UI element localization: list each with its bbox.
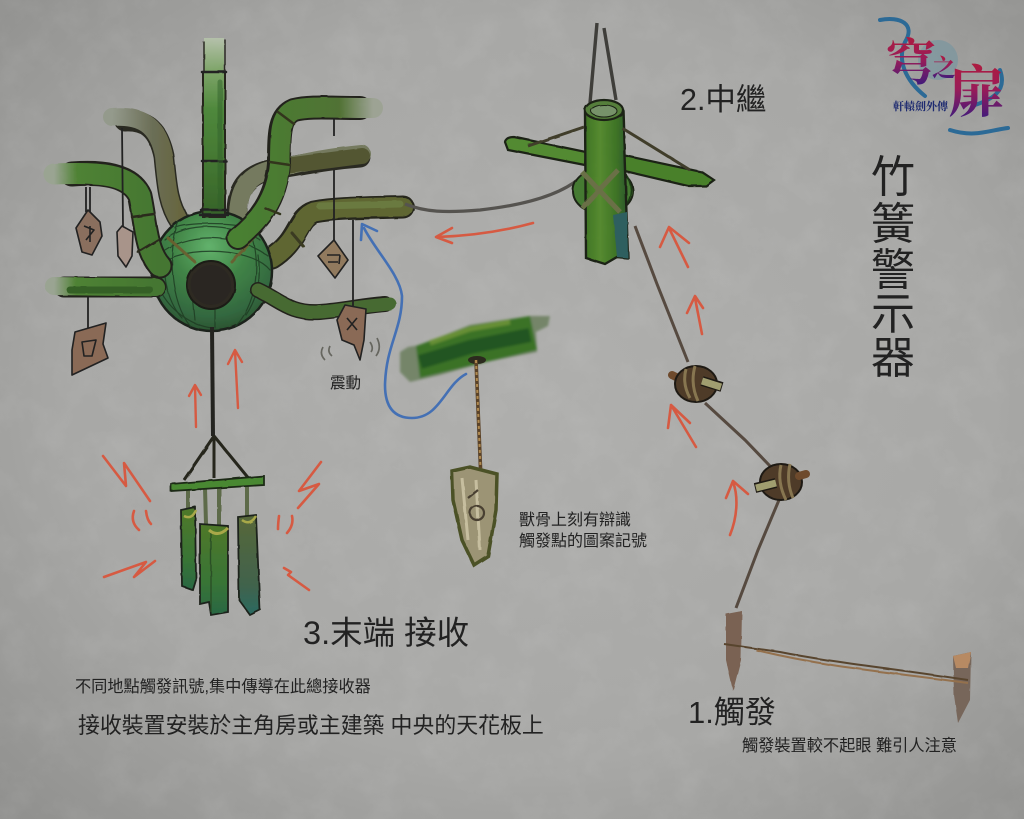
arm: right mid: [272, 204, 403, 258]
logo: 穹: [886, 23, 936, 95]
relay hanging strings: [590, 23, 616, 103]
arm: back right gray: [237, 154, 362, 218]
title: vertical: 簧: [871, 200, 915, 249]
knot upper: [672, 366, 722, 402]
note: signals: 不同地點觸發訊號,集中傳導在此總接收器: [75, 677, 371, 696]
logo: 扉: [948, 49, 1004, 129]
red arrow: toward receiver: [436, 223, 533, 243]
knot lower: [755, 464, 806, 500]
note: bone carving: 觸發點的圖案記號: [519, 532, 647, 550]
logo: [880, 19, 1008, 133]
arm: right lower: [258, 290, 390, 312]
pendulum hole: [468, 356, 486, 364]
arm: left lower: [54, 286, 156, 290]
relay arm right: [612, 153, 714, 186]
chime tube 1: [181, 507, 196, 590]
strings: [86, 118, 353, 330]
logo: 軒轅劍外傳: [893, 98, 948, 114]
label: receiver: 3.末端 接收: [303, 615, 469, 651]
title: vertical: 器: [871, 334, 915, 383]
red arrows along rope: [660, 227, 748, 535]
trip rope: [635, 226, 779, 608]
title: vertical: [871, 153, 915, 383]
hanging tags: [72, 118, 366, 375]
trip wire: [724, 644, 968, 680]
tag: crystal bone: [117, 226, 133, 267]
blue route line: [361, 224, 466, 418]
pendulum rope: [476, 360, 481, 495]
label: vibration: 震動: [330, 374, 361, 392]
red signal marks around chime: [103, 456, 321, 590]
note: bone carving: [519, 511, 647, 550]
chime tube 3: [238, 515, 260, 615]
tag: diamond: [318, 240, 348, 278]
title: vertical: 警: [871, 246, 915, 295]
vibration marks: [321, 338, 379, 360]
chime bar: [171, 476, 264, 491]
relay bamboo: [505, 100, 714, 264]
title: vertical: 示: [871, 290, 915, 339]
label: relay: 2.中繼: [680, 83, 766, 117]
note: installation: 接收裝置安裝於主角房或主建築 中央的天花板上: [78, 713, 544, 738]
main receiver: bamboo ball with arms: [54, 38, 403, 331]
relay ball: [573, 168, 633, 214]
tag: left upper bone: [76, 210, 102, 255]
relay tube: [585, 110, 628, 264]
logo: 之: [932, 48, 956, 83]
title: vertical: 竹: [871, 153, 915, 202]
label: trigger: 1.觸發: [688, 695, 776, 730]
cable: receiver to relay: [405, 178, 580, 212]
note: bone carving: 獸骨上刻有辯識: [519, 511, 631, 529]
rope knots: [672, 366, 806, 500]
wind chime: [171, 436, 264, 615]
relay lashing: [582, 170, 620, 212]
red arrows: upward to receiver: [189, 350, 242, 427]
tag: lower left bone: [72, 323, 108, 375]
carved bone tag: [452, 467, 497, 565]
stake left: [726, 611, 742, 691]
relay arm left: [505, 137, 586, 165]
trigger stakes: [724, 611, 971, 723]
sphere body: [152, 211, 272, 331]
arm: front left upper: [54, 173, 160, 266]
bamboo stem: top vertical: [200, 38, 228, 218]
note: trigger: 觸發裝置較不起眼 難引人注意: [742, 736, 957, 755]
arm: front right upper: [238, 108, 373, 238]
pendulum bamboo: [400, 316, 550, 382]
sphere hole: [187, 261, 235, 309]
central cable to wind chime: [212, 327, 213, 436]
chime tube 2: [200, 524, 228, 615]
arm: back left faded: [112, 117, 180, 222]
tag: vibrating bone: [337, 305, 366, 360]
stake right: [953, 652, 971, 723]
sphere weave lines: [155, 222, 270, 328]
